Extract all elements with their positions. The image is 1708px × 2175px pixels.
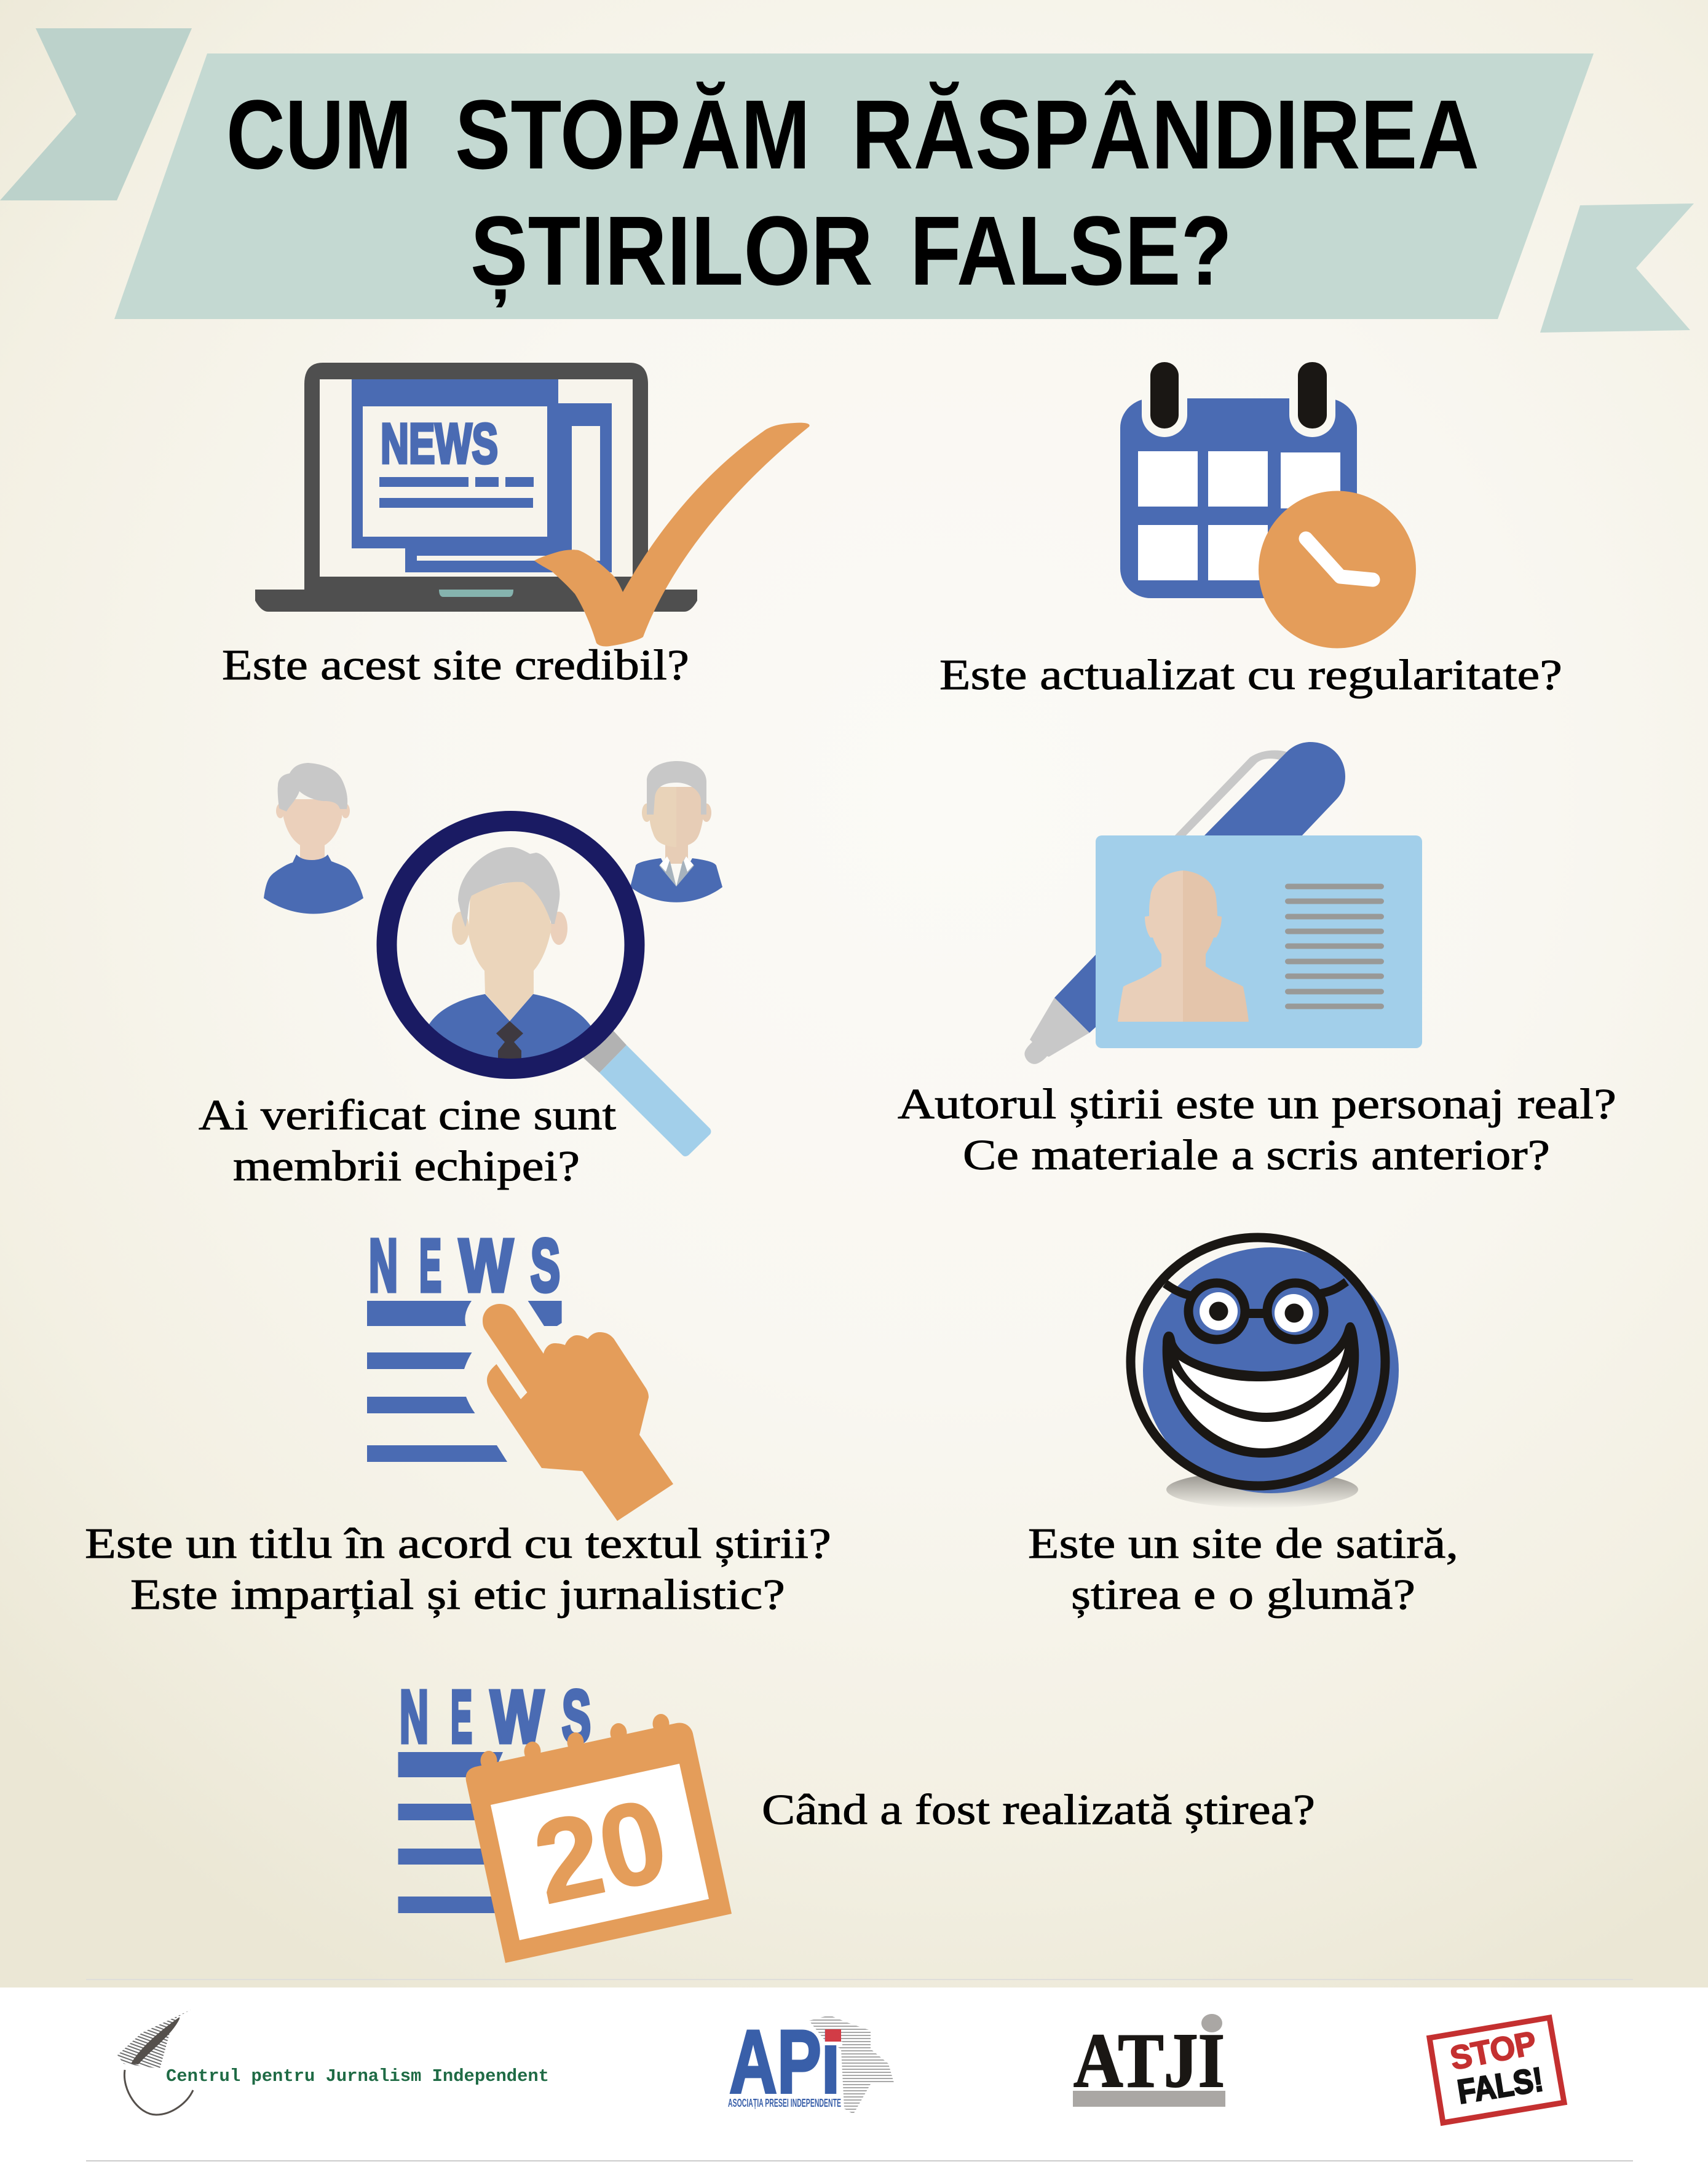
logo: Stop Fals stamp [1429,2018,1564,2123]
icon: calendar with clock [1120,362,1416,648]
icon: news heading: S [562,1675,591,1758]
header [0,28,1694,333]
icon: news heading: W [491,1675,544,1758]
panel: updated regularly [939,362,1562,699]
caption: Este un titlu în acord cu textul știrii? [85,1520,831,1568]
title: RĂSPÂNDIREA [852,79,1479,189]
title: ȘTIRILOR [470,195,873,308]
caption: Ce materiale a scris anterior? [963,1132,1550,1179]
icon: news heading: E [451,1675,472,1758]
ribbon: right tail [1540,203,1694,333]
caption: membrii echipei? [233,1143,580,1190]
title: CUM [226,79,412,189]
icon: left person [264,763,363,914]
panel: satire [1028,1238,1458,1619]
icon: news heading: W [459,1223,513,1307]
icon: right person [630,761,722,902]
logo: Centrul pentru Jurnalism Independent [117,2010,549,2115]
logo: ATJI: ATJI [1073,2018,1225,2104]
icon: id card [1096,835,1422,1048]
caption [199,1092,617,1190]
footer background [0,1988,1708,2175]
caption [85,1520,831,1619]
icon: text lines [367,1301,562,1462]
caption [1028,1520,1458,1619]
icon: tilted calendar: 20 [524,1774,678,1929]
caption: Ai verificat cine sunt [199,1092,617,1139]
icon: pointing hand [483,1304,673,1521]
icon: news heading: E [419,1223,441,1307]
panel: credible site [222,363,810,689]
panel: author [898,742,1616,1179]
icon: check mark [534,423,810,646]
footer band [0,1979,1708,2175]
title [226,79,1479,308]
icon: smiley with glasses [1131,1238,1399,1508]
caption: Când a fost realizată știrea? [762,1786,1315,1834]
logo: Asociația Presei Independente: API [729,2011,840,2112]
icon: laptop with news page: NEWS [381,412,498,475]
caption: Este actualizat cu regularitate? [939,652,1562,699]
caption: Este acest site credibil? [222,642,689,689]
caption: Autorul știrii este un personaj real? [898,1081,1616,1128]
icon: news heading [369,1223,560,1307]
title banner [114,53,1594,319]
caption: știrea e o glumă? [1071,1571,1415,1619]
logo: Stop Fals stamp: STOP [1447,2024,1540,2077]
icon: magnifying glass handle [583,1030,711,1156]
panel: headline and text [85,1223,831,1619]
icon: text lines [398,1752,503,1913]
panel: date of the news [398,1675,1315,1963]
caption [898,1081,1616,1179]
icon: news heading: N [369,1223,398,1307]
title: FALSE? [910,195,1232,306]
caption: Este un site de satiră, [1028,1520,1458,1568]
icon: news heading: S [531,1223,560,1307]
icon: pen [1024,742,1345,1064]
icon: lens ring [387,821,635,1068]
logo: Centrul pentru Jurnalism Independent: Centrul pentru Jurnalism Independent [166,2066,549,2086]
panel: team members [199,761,722,1190]
icon: news heading [400,1675,591,1758]
title: STOPĂM [455,79,810,189]
ribbon: left tail [0,28,192,200]
icon: person inside lens [429,847,590,1059]
caption: Este imparțial și etic jurnalistic? [130,1571,785,1619]
logo: Asociația Presei Independente: ASOCIAȚIA PRESEI INDEPENDENTE [728,2097,841,2109]
icon: tilted calendar [466,1714,732,1963]
logo: Stop Fals stamp: FALS! [1455,2060,1546,2111]
icon: news heading: N [400,1675,429,1758]
icon: laptop with news page [255,363,697,612]
